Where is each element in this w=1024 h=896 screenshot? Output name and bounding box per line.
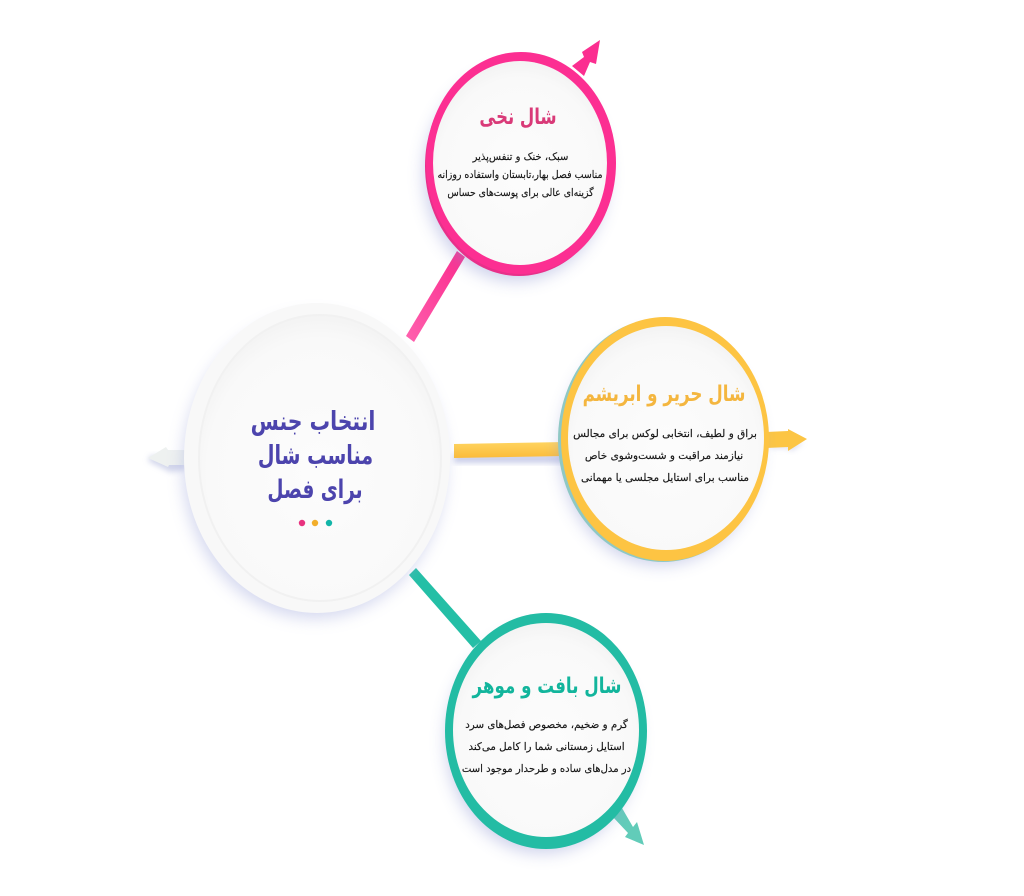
- arrow: yellow connector: [454, 429, 807, 463]
- heading: cotton: شال نخی: [479, 104, 557, 130]
- title: central heading: [251, 406, 375, 505]
- title: central heading: برای فصل: [267, 475, 363, 505]
- text: silk description: نیازمند مراقبت و شست‌وشوی خاص: [585, 450, 743, 462]
- dots: three accent colours: [299, 520, 332, 526]
- title: central heading: انتخاب جنس: [251, 406, 375, 437]
- text: silk description: [573, 428, 757, 484]
- text: cotton description: سبک، خنک و تنفس‌پذیر: [472, 151, 568, 163]
- title: central heading: مناسب شال: [258, 441, 373, 471]
- text: cotton description: گزینه‌ای عالی برای پوست‌های حساس: [447, 186, 594, 199]
- text: silk description: مناسب برای استایل مجلسی یا مهمانی: [581, 472, 749, 484]
- text: knit and wool description: استایل زمستانی شما را کامل می‌کند: [468, 741, 625, 753]
- text: knit and wool description: [462, 718, 631, 775]
- text: knit and wool description: در مدل‌های ساده و طرحدار موجود است: [462, 763, 631, 775]
- arrow: grey pointing left: [148, 447, 186, 472]
- panel: silk shawl, yellow: [558, 317, 769, 565]
- panel: knit and wool shawl, teal: [445, 613, 647, 853]
- text: knit and wool description: گرم و ضخیم، مخصوص فصل‌های سرد: [465, 718, 628, 731]
- arrow: pink connector: [406, 40, 600, 342]
- text: cotton description: مناسب فصل بهار،تابستان واستفاده روزانه: [437, 170, 603, 181]
- heading: silk: شال حریر و ابریشم: [583, 381, 745, 407]
- heading: knit and wool: شال بافت و موهر: [472, 673, 621, 699]
- panel: central circle: [183, 303, 450, 618]
- panel: cotton shawl, pink: [424, 52, 616, 281]
- text: silk description: براق و لطیف، انتخابی لوکس برای مجالس: [573, 428, 757, 440]
- arrow: teal connector: [409, 568, 644, 845]
- text: cotton description: [437, 151, 603, 199]
